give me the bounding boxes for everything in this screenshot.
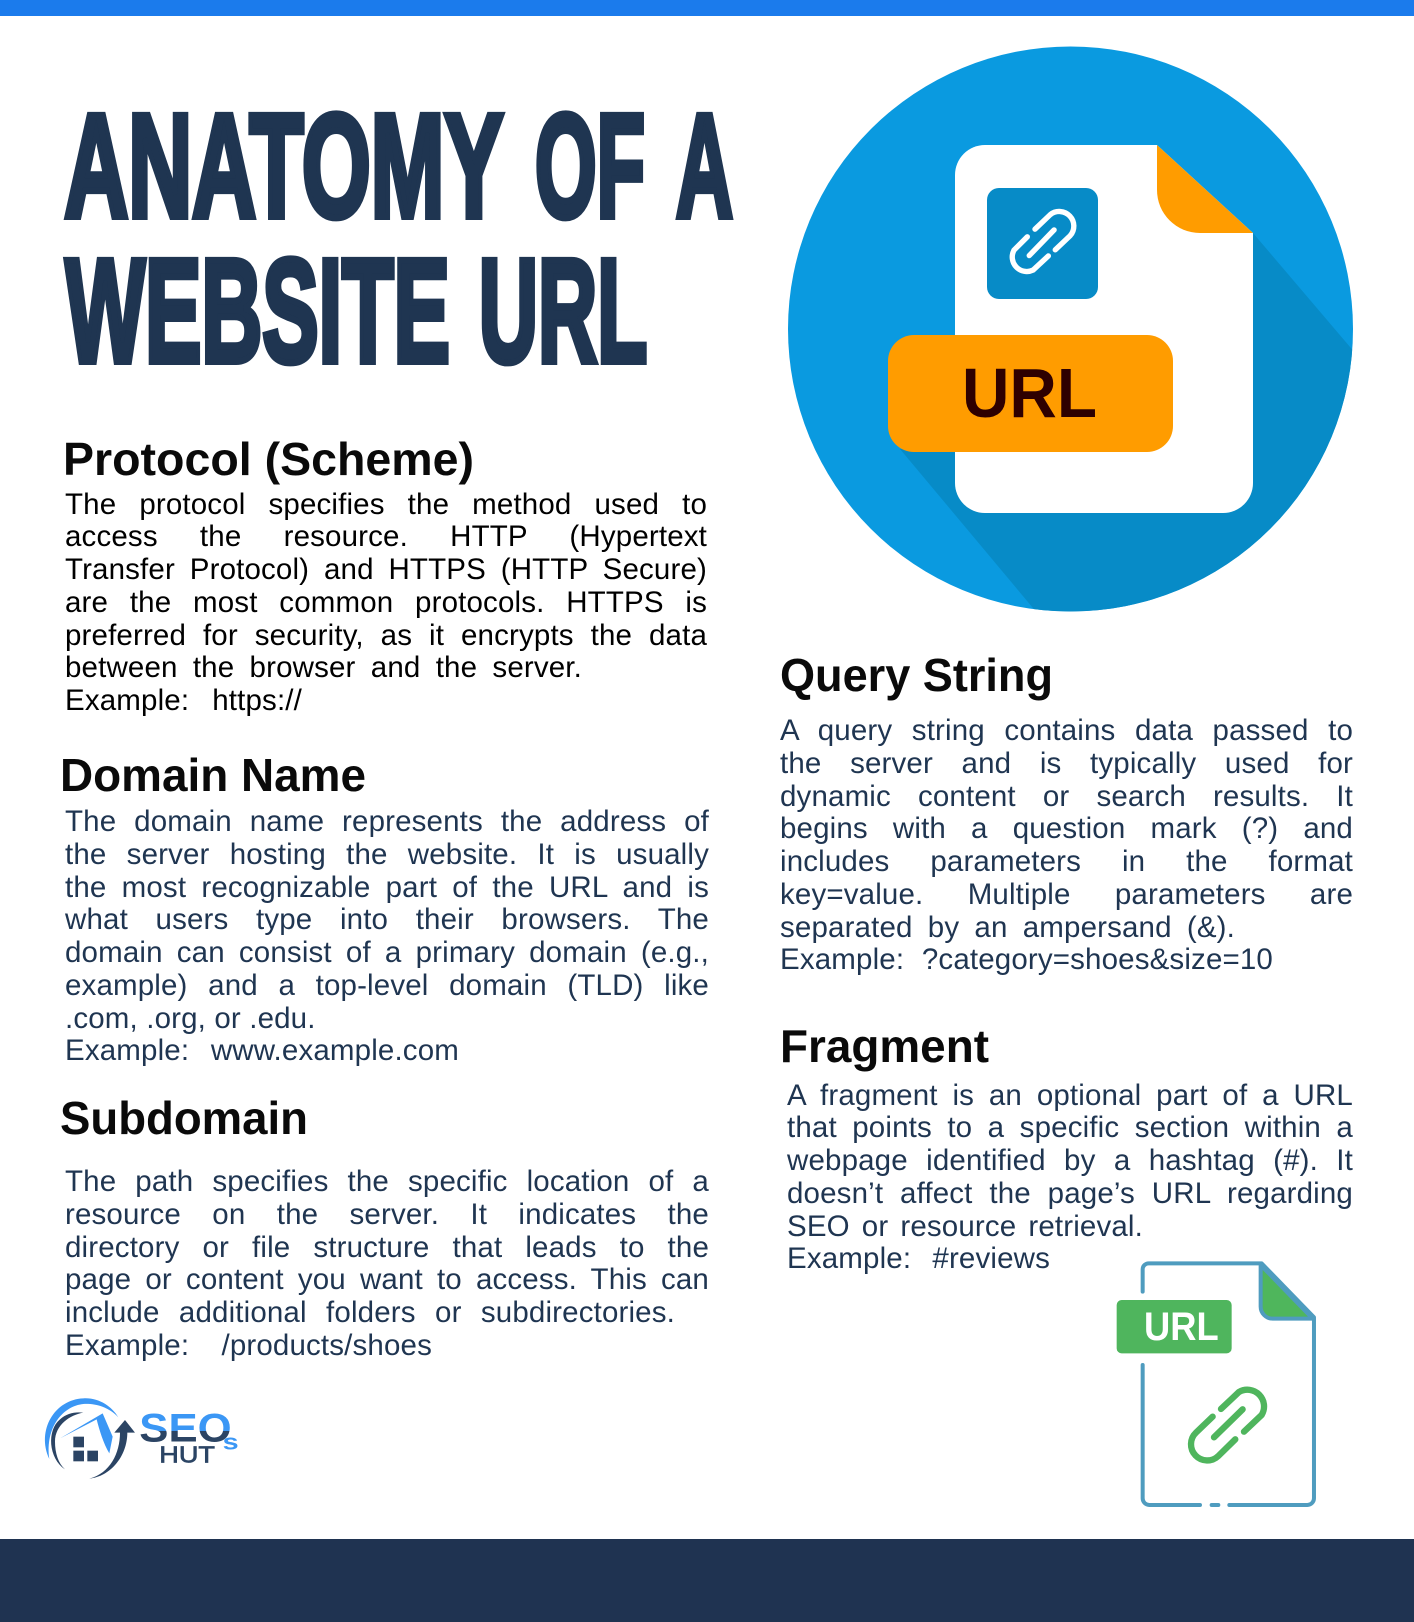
text block: Query String: key=value. Multiple parameters are xyxy=(780,878,1353,911)
text block: Query String: separated by an ampersand (&). xyxy=(780,910,1235,944)
text block: Query String: A query string contains data passed to xyxy=(780,714,1353,747)
heading: Protocol (Scheme): Protocol (Scheme) xyxy=(63,433,474,485)
text block: Subdomain: page or content you want to access. This can xyxy=(65,1263,709,1296)
text block: Query String: dynamic content or search results. It xyxy=(780,780,1353,812)
logo: SEOs Hut: HUT xyxy=(159,1442,215,1468)
icon: blue URL document badge: URL xyxy=(962,354,1097,432)
title: OF xyxy=(535,84,645,248)
icon: green URL document outline: URL xyxy=(1144,1305,1219,1349)
title xyxy=(64,84,733,394)
text block: Domain Name xyxy=(65,805,709,1067)
icon: blue URL document badge xyxy=(788,46,1356,620)
text block: Subdomain xyxy=(65,1165,709,1362)
text block: Domain Name: the server hosting the website. It is usually xyxy=(65,838,709,871)
heading: Subdomain: Subdomain xyxy=(60,1092,308,1144)
text block: Domain Name: Example: www.example.com xyxy=(65,1034,459,1067)
text block: Protocol: between the browser and the server. xyxy=(65,651,582,684)
text block: Protocol: access the resource. HTTP (Hypertext xyxy=(65,520,707,553)
text block: Subdomain: resource on the server. It indicates the xyxy=(65,1198,709,1231)
heading: Query String: Query String xyxy=(780,649,1053,701)
text block: Query String: begins with a question mark (?) and xyxy=(780,812,1353,845)
text block: Domain Name: The domain name represents the address of xyxy=(65,805,709,838)
logo: SEOs Hut xyxy=(45,1398,239,1479)
text block: Domain Name: domain can consist of a primary domain (e.g., xyxy=(65,936,709,969)
text block: Query String xyxy=(780,714,1353,976)
text block: Domain Name: the most recognizable part of the URL and is xyxy=(65,870,709,904)
text block: Fragment: Example: #reviews xyxy=(787,1242,1050,1275)
footer band xyxy=(0,1539,1414,1622)
text block: Query String: Example: ?category=shoes&size=10 xyxy=(780,943,1273,976)
heading: Fragment: Fragment xyxy=(780,1020,989,1072)
text block: Protocol: preferred for security, as it encrypts the data xyxy=(65,618,707,652)
text block: Protocol: Transfer Protocol) and HTTPS (HTTP Secure) xyxy=(65,553,707,586)
text block: Fragment: that points to a specific section within a xyxy=(787,1111,1353,1144)
heading: Domain Name: Domain Name xyxy=(60,749,366,801)
text block: Domain Name: what users type into their browsers. The xyxy=(65,903,709,936)
text block: Fragment: A fragment is an optional part of a URL xyxy=(787,1078,1353,1112)
text block: Fragment: webpage identified by a hashtag (#). It xyxy=(787,1144,1353,1177)
text block: Protocol: Example: https:// xyxy=(65,684,302,717)
text block: Subdomain: include additional folders or subdirectories. xyxy=(65,1296,675,1329)
logo: SEOs Hut: s xyxy=(223,1429,239,1454)
logo: SEOs Hut: SEO xyxy=(139,1407,232,1451)
text block: Fragment xyxy=(787,1078,1353,1275)
text block: Query String: the server and is typically used for xyxy=(780,747,1353,780)
text block: Protocol: The protocol specifies the method used to xyxy=(65,488,707,520)
text block: Query String: includes parameters in the format xyxy=(780,845,1353,878)
text block: Subdomain: The path specifies the specific location of a xyxy=(65,1165,709,1198)
title: A xyxy=(676,84,733,248)
top bar xyxy=(0,0,1414,16)
title: WEBSITE xyxy=(65,230,450,394)
text block: Domain Name: .com, .org, or .edu. xyxy=(65,1002,316,1034)
icon: green URL document outline xyxy=(1117,1263,1314,1505)
text block: Fragment: SEO or resource retrieval. xyxy=(787,1210,1143,1242)
text block: Fragment: doesn’t affect the page’s URL regarding xyxy=(787,1177,1353,1210)
text block: Domain Name: example) and a top-level domain (TLD) like xyxy=(65,969,709,1002)
text block: Subdomain: Example: /products/shoes xyxy=(65,1329,432,1362)
text block: Subdomain: directory or file structure that leads to the xyxy=(65,1230,709,1264)
text block: Protocol xyxy=(65,488,707,717)
text block: Protocol: are the most common protocols. HTTPS is xyxy=(65,586,707,619)
title: ANATOMY xyxy=(64,84,503,248)
title: URL xyxy=(479,230,647,394)
